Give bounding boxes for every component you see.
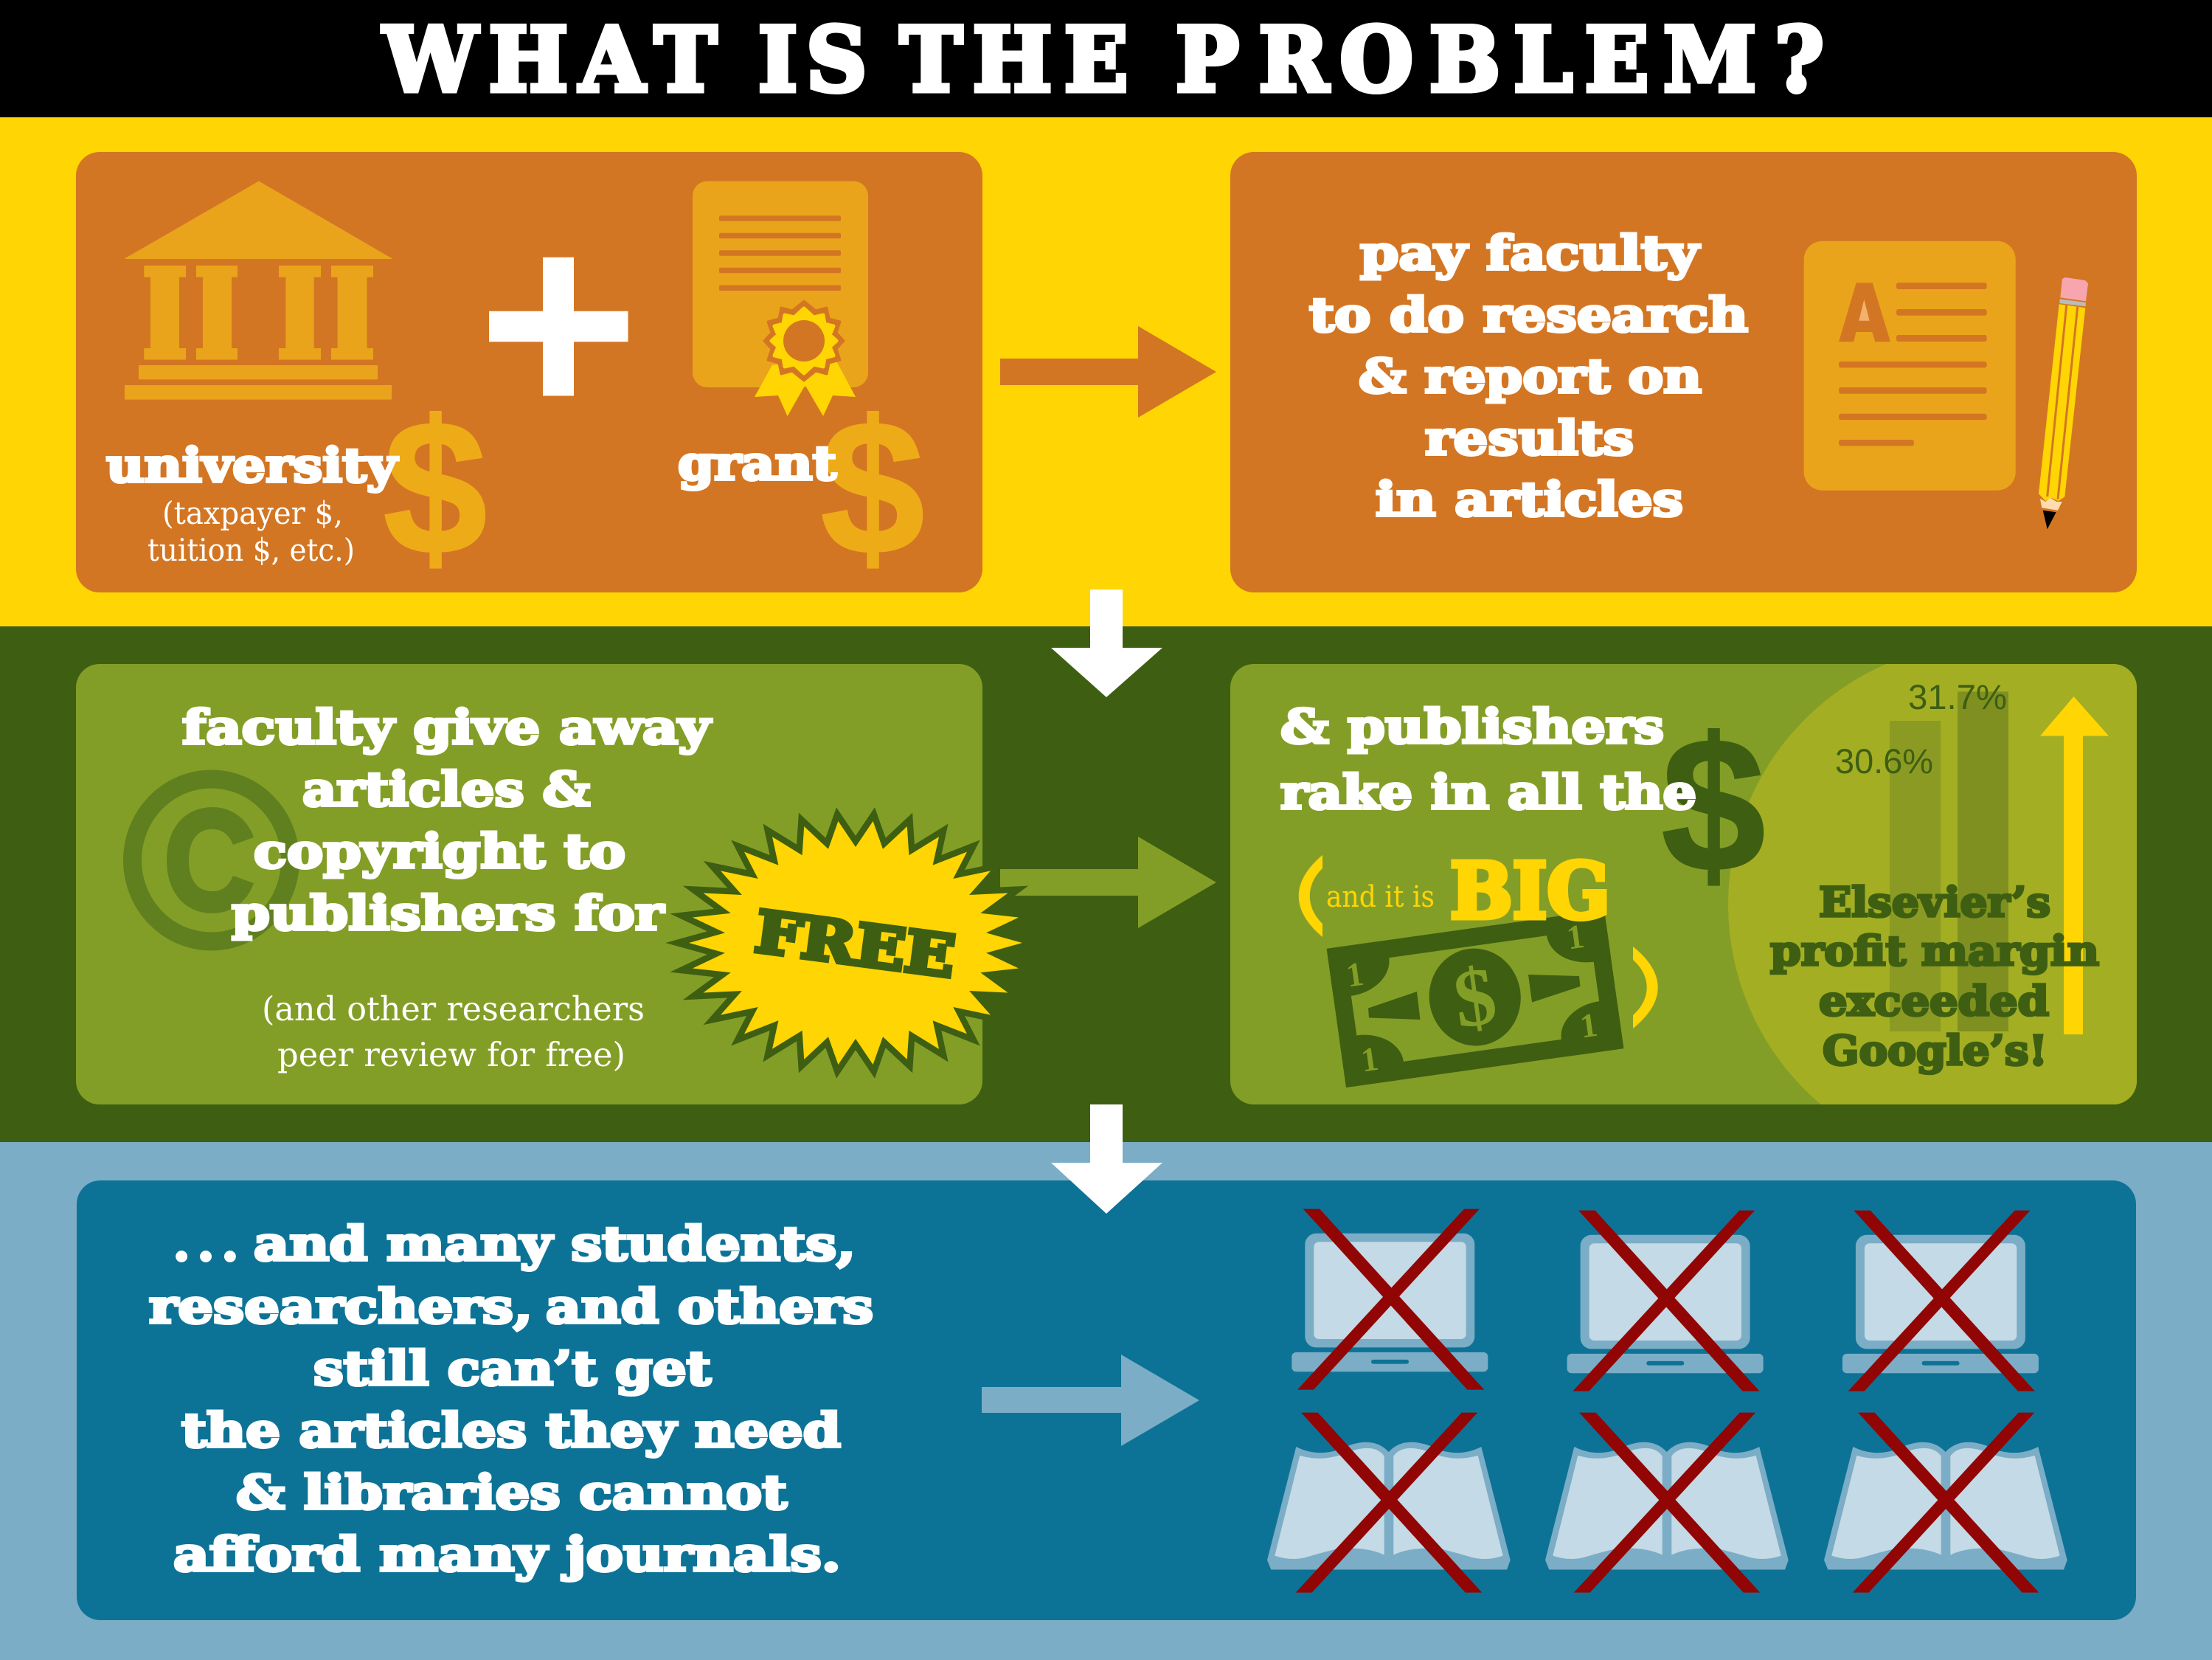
text: faculty give away articles: articles & [302,762,590,817]
text: pay faculty to do research: & report on [1359,349,1702,404]
title: WHAT [382,7,717,112]
text: faculty give away articles: publishers for [232,886,665,941]
title band [0,0,2212,117]
text: Elsevier's profit margin: Google’s! [1823,1026,2048,1074]
parenthesis: left [1299,855,1322,937]
text: students and libraries: the articles they need [181,1403,841,1459]
text: publishers rake in: & publishers [1280,699,1664,755]
icon: dollar bill: $ [1449,950,1502,1046]
title: IS [758,7,867,112]
text: and it is: and it is [1326,880,1435,914]
arrow: down from yellow [1051,589,1162,697]
text: Elsevier's profit margin: Elsevier’s [1819,878,2050,926]
label: funding sources: (taxpayer $, [162,495,343,531]
label: 31.7%: 31.7% [1908,677,2007,716]
icon: dollar bill: 1 [1344,955,1366,995]
text: pay faculty to do research: in articles [1376,472,1683,528]
text: BIG: BIG [1450,845,1610,936]
label: university: university [106,438,398,494]
text: Elsevier's profit margin [1770,878,2099,1074]
text: students and libraries: afford many journals. [173,1527,841,1583]
bar chart: profit margins [1835,677,2008,1031]
text: students and libraries: ... [173,1217,238,1272]
icon: article document [1804,241,2016,491]
panel: university plus grant [76,152,982,595]
text: faculty give away articles [182,700,712,941]
arrow: row 2 right [1000,837,1216,928]
starburst: FREE [689,821,1022,1065]
icon: dollar sign university: $ [384,382,487,595]
title [382,7,1824,112]
icon: dollar bill: 1 [1359,1040,1381,1079]
icon: crossed book 3 [1824,1413,2067,1593]
parenthesis: right [1633,947,1658,1028]
text: peer review note: (and other researchers [262,989,645,1028]
text: faculty give away articles: faculty give away [182,700,712,755]
icon: dollar bill: 1 [1564,917,1587,957]
text: peer review note: peer review for free) [277,1035,625,1074]
label: 30.6%: 30.6% [1835,741,1933,781]
label: funding sources: tuition $, etc.) [148,532,355,568]
title: THE [900,7,1128,112]
text: students and libraries: and others [546,1279,873,1335]
text: Elsevier's profit margin: profit margin [1770,927,2099,975]
icon: crossed laptop 1 [1292,1209,1488,1390]
panel: faculty give away [76,664,982,1104]
text: students and libraries: and many students, [254,1217,856,1272]
icon: copyright symbol [133,779,291,941]
icon: grant certificate [693,181,868,416]
panel: publishers rake in [1230,664,2137,1104]
arrow: down from green [1051,1104,1162,1214]
text: pay faculty to do research: pay faculty [1360,226,1700,281]
label: grant: grant [678,436,836,491]
icon: crossed book 2 [1545,1413,1789,1593]
text: Elsevier's profit margin: exceeded [1819,977,2049,1025]
text: faculty give away articles: copyright to [254,824,625,879]
panel: students cannot get [77,1180,2136,1620]
band: yellow background [0,117,2212,626]
band: green background [0,626,2212,1142]
text: pay faculty to do research [1309,226,1748,528]
band: blue background [0,1142,2212,1660]
text: publishers rake in: rake in all the [1280,765,1696,820]
icon: crossed laptop 3 [1842,1211,2039,1391]
text: pay faculty to do research: results [1425,411,1634,466]
icon: dollar sign grant: $ [821,382,924,595]
icon: crossed book 1 [1267,1413,1511,1593]
arrow: yellow up [2040,696,2109,1034]
icon: dollar bill: 1 [1578,1006,1600,1045]
text: students and libraries: still can’t get [313,1341,711,1397]
arrow: row 1 right [1000,326,1216,418]
text: students and libraries: researchers, [149,1279,533,1335]
text: students and libraries: & libraries cannot [236,1465,788,1521]
text: peer review note [262,989,645,1074]
icon: dollar bill [1326,916,1624,1087]
arrow: row 3 right [982,1355,1199,1446]
label: funding sources [148,495,355,568]
text: pay faculty to do research: to do research [1309,288,1748,343]
title: PROBLEM? [1176,7,1824,112]
icon: dark dollar sign: $ [1662,699,1765,912]
icon: plus sign [489,257,628,395]
highlight: profit margin circle [1728,664,2137,1104]
icon: pencil [2039,277,2088,529]
text: FREE: FREE [752,899,959,991]
icon: crossed laptop 2 [1567,1211,1764,1391]
icon: university building [124,181,393,400]
panel: pay faculty [1230,152,2137,592]
text: publishers rake in [1280,699,1696,820]
text: students and libraries [149,1217,873,1583]
